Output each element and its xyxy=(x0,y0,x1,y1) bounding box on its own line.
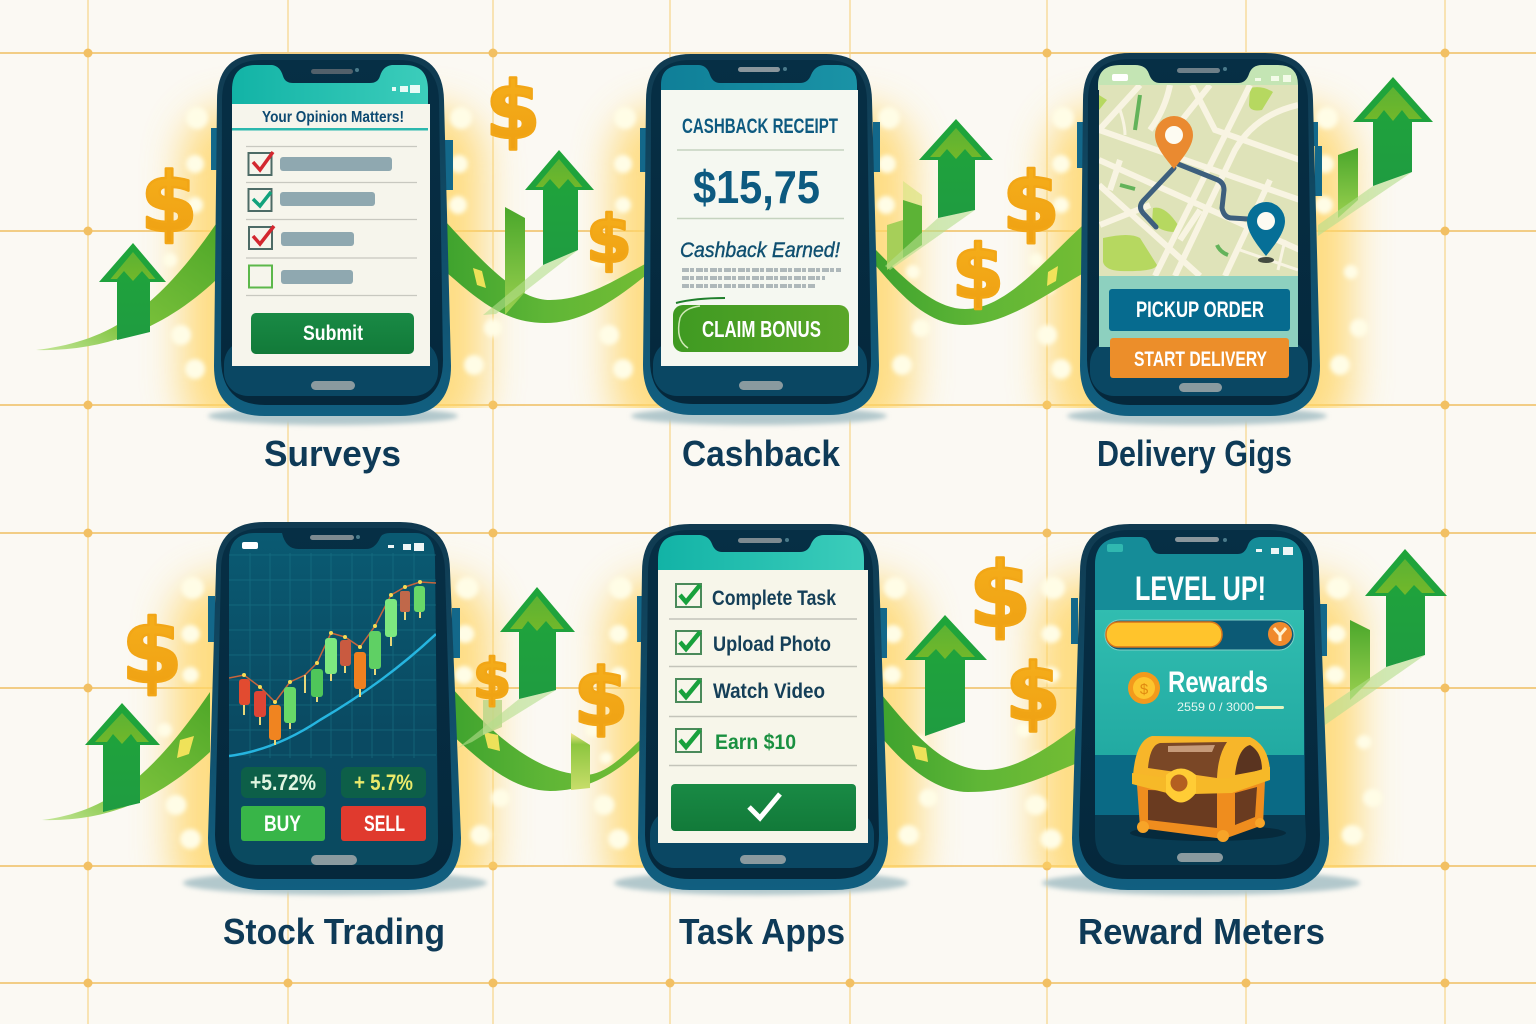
icon: up arrow 8 xyxy=(1325,549,1447,725)
confirm button xyxy=(671,784,856,831)
icon: orange pin xyxy=(1155,116,1193,169)
panel: task apps phone xyxy=(614,524,908,895)
icon: up arrow 3 xyxy=(885,119,993,270)
label: Cashback: Cashback xyxy=(682,433,841,474)
task list card: Upload Photo xyxy=(713,633,831,656)
icon: up arrow 2 xyxy=(483,150,594,315)
heading: level up: LEVEL UP! xyxy=(1135,570,1266,608)
label: Reward Meters: Reward Meters xyxy=(1078,911,1325,952)
start delivery button: START DELIVERY xyxy=(1134,348,1267,371)
submit button xyxy=(251,313,414,354)
cashback screen header xyxy=(661,65,857,90)
receipt card: CASHBACK RECEIPT xyxy=(682,115,838,138)
pickup order button: PICKUP ORDER xyxy=(1136,297,1264,322)
buy button: BUY xyxy=(264,811,301,836)
icon: dollar sign 6: $ xyxy=(121,600,183,703)
percent badge left: +5.72% xyxy=(250,770,316,795)
candlestick chart xyxy=(229,553,436,758)
panel: cashback phone xyxy=(631,54,887,425)
reward screen xyxy=(1095,537,1305,815)
delivery action panel xyxy=(1099,276,1298,347)
panel: reward meters phone xyxy=(1042,524,1360,895)
label: Stock Trading: Stock Trading xyxy=(223,911,445,952)
buy button xyxy=(241,806,325,841)
label: Surveys: Surveys xyxy=(264,433,401,474)
task list card: Watch Video xyxy=(713,680,825,703)
rewards text: Rewards xyxy=(1168,666,1268,699)
progress bar xyxy=(1105,620,1294,650)
icon: dollar sign 2: $ xyxy=(486,65,540,157)
icon: dollar sign 10: $ xyxy=(1006,647,1060,739)
delivery status bar xyxy=(1098,65,1298,90)
panel: surveys phone xyxy=(208,54,458,425)
receipt card xyxy=(661,90,858,366)
icon: dollar sign 7: $ xyxy=(473,647,511,711)
task list card: Complete Task xyxy=(712,587,836,610)
survey screen header xyxy=(232,65,428,104)
icon: coin: $ xyxy=(1140,681,1149,698)
stock screen xyxy=(229,533,438,865)
icon: coin xyxy=(1128,672,1160,704)
sell button xyxy=(341,806,426,841)
claim bonus button: CLAIM BONUS xyxy=(702,316,821,342)
survey form card xyxy=(232,104,430,366)
panel: stock trading phone xyxy=(183,522,487,895)
reward progress numbers xyxy=(1177,700,1284,714)
icon: dollar sign 1: $ xyxy=(140,156,198,251)
map xyxy=(1099,85,1300,276)
task list card: Earn $10 xyxy=(715,731,796,754)
task screen header xyxy=(658,535,864,570)
pickup order button xyxy=(1109,289,1290,331)
icon: up arrow 6 xyxy=(458,587,575,748)
start delivery button xyxy=(1110,338,1289,378)
status icons xyxy=(392,85,420,93)
green bars by arrows xyxy=(483,148,1370,790)
survey form card: Your Opinion Matters! xyxy=(262,109,404,126)
receipt card: Cashback Earned! xyxy=(680,239,840,262)
green growth ribbons xyxy=(36,222,1082,820)
claim bonus button xyxy=(673,298,849,352)
receipt card: $15,75 xyxy=(693,161,820,213)
task list card xyxy=(658,570,868,843)
icon: up arrow 7 xyxy=(905,615,987,736)
icon: dollar sign 3: $ xyxy=(586,201,632,278)
icon: treasure chest xyxy=(1130,736,1286,842)
submit button: Submit xyxy=(303,322,363,345)
icon: up arrow 4 xyxy=(1318,77,1433,236)
golden glow behind phones xyxy=(172,108,1360,908)
reward progress numbers: 2559 0 / 3000 xyxy=(1177,700,1254,714)
panel: delivery phone xyxy=(1067,53,1327,425)
label: Task Apps: Task Apps xyxy=(679,911,845,952)
icon: up arrow 1 xyxy=(99,243,166,340)
percent badge right xyxy=(341,767,426,798)
icon: blue pin xyxy=(1247,202,1285,263)
label: Delivery Gigs: Delivery Gigs xyxy=(1097,433,1292,474)
icon: up arrow 5 xyxy=(85,703,160,812)
icon: dollar sign 8: $ xyxy=(574,652,628,744)
icon: dollar sign 5: $ xyxy=(952,228,1004,316)
percent badge right: + 5.7% xyxy=(354,770,413,795)
sell button: SELL xyxy=(364,811,405,836)
glow dots xyxy=(157,107,1383,849)
icon: dollar sign 4: $ xyxy=(1002,154,1060,251)
icon: dollar sign 9: $ xyxy=(969,543,1031,648)
